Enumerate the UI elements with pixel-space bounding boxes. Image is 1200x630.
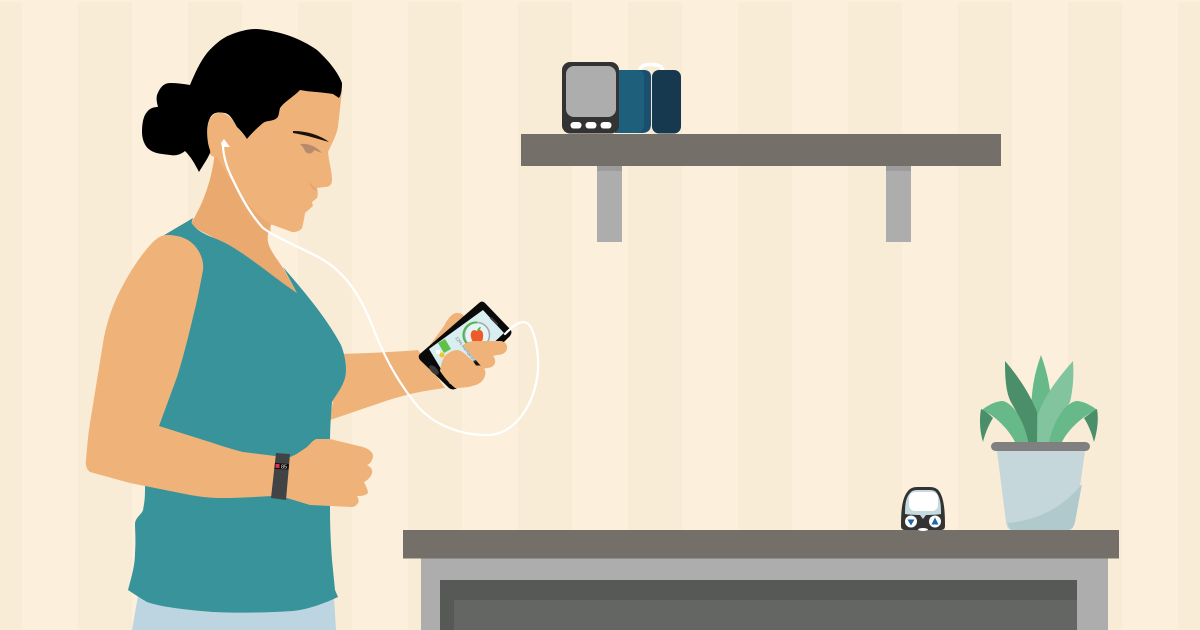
apple icon [471,330,483,342]
lower fingers [440,350,485,388]
hand behind phone [430,313,480,385]
earphone cable [221,139,538,435]
smartphone in hand: 12% Remaining [454,336,478,364]
hair [142,29,342,172]
wall shelf [521,134,1001,242]
eyebrow [293,131,329,142]
speaker and button details [491,318,497,324]
smartphone in hand [419,302,512,390]
jaw shading [232,178,271,232]
goal ring [464,322,490,348]
neck [191,150,297,293]
fitness wristband: 85 [281,464,287,470]
potted plant [980,355,1098,530]
nose shading [309,182,317,191]
eye [300,144,322,154]
screen [429,310,504,384]
head and ear [206,86,342,232]
fitness wristband [271,453,290,500]
woman [86,29,445,630]
near arm and hand [86,235,373,507]
tank top [128,218,346,613]
earbud [221,139,230,147]
far forearm to phone [330,350,445,420]
counter [403,530,1119,630]
upper fingers [463,341,507,369]
phone body [419,302,512,390]
shelf devices: scale and blood pressure cuff [562,62,681,134]
pants [132,596,336,630]
small robot sensor [901,487,945,531]
